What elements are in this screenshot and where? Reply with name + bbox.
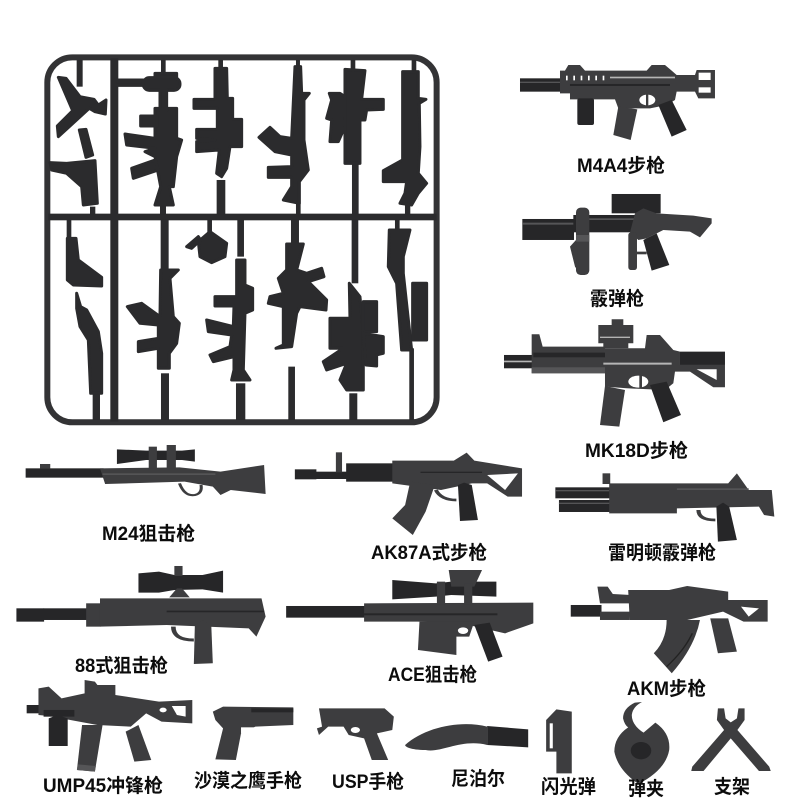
weapon: Remington shotgun xyxy=(555,473,774,542)
sprue: MK18D rifle xyxy=(268,244,327,348)
label: flash grenade: 闪光弹 xyxy=(541,776,596,798)
weapon: M24 sniper rifle xyxy=(26,445,266,495)
weapon: Nepal kukri xyxy=(405,724,528,750)
sprue: bipod, knife and pistol xyxy=(50,77,106,205)
label: bipod: 支架 xyxy=(714,776,750,798)
weapon: flash grenade xyxy=(546,709,572,773)
label: M24 sniper rifle: M24狙击枪 xyxy=(102,522,195,545)
weapon: shotgun xyxy=(522,194,712,275)
sprue: ACE sniper xyxy=(323,283,383,390)
weapon: AKM rifle xyxy=(571,586,768,673)
label: magazine: 弹夹 xyxy=(628,778,664,800)
sprue: M24 sniper xyxy=(388,230,427,350)
weapon: Desert Eagle pistol xyxy=(213,707,293,760)
label: Desert Eagle pistol: 沙漠之鹰手枪 xyxy=(194,769,302,792)
label: shotgun: 霰弹枪 xyxy=(590,287,644,310)
label: UMP45 submachine gun: UMP45冲锋枪 xyxy=(43,774,163,797)
label: Remington shotgun: 雷明顿霰弹枪 xyxy=(608,541,716,564)
weapon: UMP45 submachine gun xyxy=(27,680,192,772)
sprue: shotgun xyxy=(194,68,242,177)
label: USP pistol: USP手枪 xyxy=(332,770,404,793)
weapon: M4A4 rifle xyxy=(520,65,715,140)
sprue: scope and pistol-grip rifle xyxy=(327,69,383,163)
weapon: ACE sniper rifle xyxy=(286,570,533,662)
weapon: bipod xyxy=(691,708,771,771)
label: ACE sniper rifle: ACE狙击枪 xyxy=(388,663,477,686)
label: Nepal kukri: 尼泊尔 xyxy=(451,768,505,790)
sprue: AK87A rifle xyxy=(127,270,179,368)
sprue: flash grenade and rifle xyxy=(115,73,182,205)
sprue frame xyxy=(47,57,437,422)
sprue: magazine and UMP xyxy=(187,232,253,380)
label: M4A4 rifle: M4A4步枪 xyxy=(577,154,665,177)
label: MK18D rifle: MK18D步枪 xyxy=(585,439,688,462)
label: AKM rifle: AKM步枪 xyxy=(627,677,706,700)
sprue: pistol and kukri xyxy=(67,238,102,393)
weapon: magazine xyxy=(614,702,669,784)
label: type 88 sniper rifle: 88式狙击枪 xyxy=(75,654,168,677)
label: AK87A rifle: AK87A式步枪 xyxy=(371,541,487,564)
weapon: AK87A rifle xyxy=(295,452,522,535)
sprue: pump shotgun xyxy=(383,72,427,205)
panel: parts sprue xyxy=(47,57,437,422)
weapon: USP pistol xyxy=(317,708,394,760)
weapon: MK18D rifle xyxy=(504,319,725,427)
weapon: type 88 sniper rifle xyxy=(16,566,266,664)
sprue: AK rifle xyxy=(259,67,309,203)
